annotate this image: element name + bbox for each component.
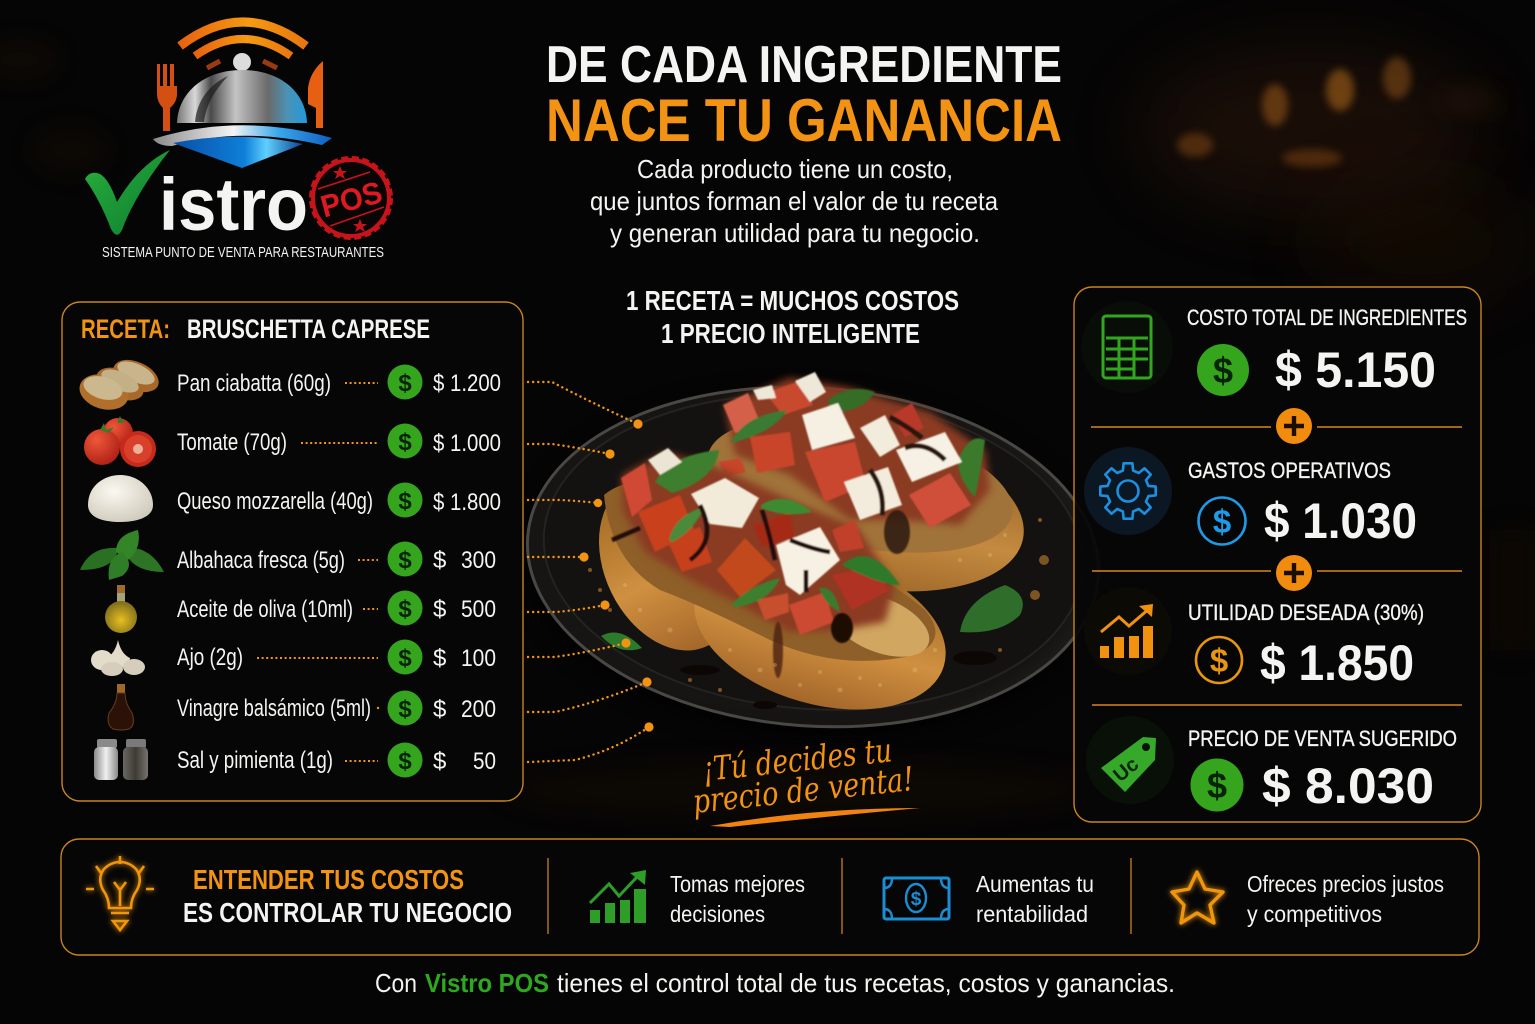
row: ajo: $ bbox=[398, 645, 412, 672]
text: decisiones bbox=[670, 871, 805, 927]
row: albahaca: $ bbox=[398, 547, 412, 574]
row: pan ciabatta bbox=[177, 364, 501, 400]
row: pan ciabatta: Pan ciabatta (60g) bbox=[177, 370, 331, 397]
icon: light bulb bbox=[86, 856, 154, 930]
row: costo total: $ 5.150 bbox=[1275, 342, 1436, 398]
crust crumbs bbox=[623, 533, 1007, 692]
row: vinagre bbox=[177, 690, 496, 726]
text: precios justos: y competitivos bbox=[1247, 901, 1382, 927]
icon: basil bbox=[80, 530, 164, 580]
row: tomate: $ bbox=[398, 429, 412, 456]
callout: tu decides: ¡Tú decides tu bbox=[701, 730, 894, 789]
icon: calculator bbox=[1081, 301, 1173, 393]
subtitle: y generan utilidad para tu negocio. bbox=[610, 218, 980, 248]
heading: entender: ENTENDER TUS COSTOS bbox=[193, 864, 464, 895]
row: sal y pimienta bbox=[177, 742, 496, 778]
icon: POS stamp bbox=[311, 158, 391, 238]
row: aceite: $ bbox=[398, 596, 412, 623]
row: albahaca: Albahaca fresca (5g) bbox=[177, 547, 345, 574]
row: precio de venta bbox=[1086, 716, 1457, 814]
title: NACE TU GANANCIA bbox=[546, 87, 1062, 154]
row: gastos operativos: $ 1.030 bbox=[1264, 493, 1417, 549]
subtitle bbox=[590, 154, 998, 248]
row: gastos operativos bbox=[1084, 447, 1417, 549]
heading: 1 receta: 1 PRECIO INTELIGENTE bbox=[661, 318, 920, 349]
row: albahaca: 300 bbox=[461, 547, 496, 574]
connectors from ingredients to plate bbox=[528, 382, 649, 762]
icon: green check bbox=[85, 150, 170, 235]
bread front bbox=[572, 456, 964, 737]
subtitle: que juntos forman el valor de tu receta bbox=[590, 186, 998, 216]
heading: receta: RECETA: bbox=[81, 314, 170, 344]
row: queso: $ 1.800 bbox=[433, 489, 501, 516]
icon: price tag bbox=[1086, 716, 1174, 804]
row: sal y pimienta: $ bbox=[433, 748, 446, 775]
row: gastos operativos: $ bbox=[1213, 503, 1231, 540]
row: tomate: Tomate (70g) bbox=[177, 429, 287, 456]
row: vinagre: 200 bbox=[461, 696, 496, 723]
toppings front bbox=[612, 448, 900, 678]
heading: entender bbox=[183, 864, 512, 928]
footer text: Vistro POS bbox=[425, 968, 549, 998]
icon: banknote bbox=[884, 878, 949, 919]
icon: price tag: Uc bbox=[1109, 753, 1143, 787]
panel: receta bbox=[62, 302, 523, 801]
icon: green chart bbox=[590, 870, 646, 923]
wordmark: istro bbox=[159, 163, 308, 246]
icon: salt and pepper bbox=[94, 739, 148, 780]
title bbox=[546, 36, 1062, 154]
row: ajo: 100 bbox=[461, 645, 496, 672]
heading: receta: BRUSCHETTA CAPRESE bbox=[187, 314, 430, 344]
row: utilidad deseada: $ bbox=[1210, 642, 1228, 679]
underline brush bbox=[710, 808, 920, 827]
icon: gear bbox=[1084, 447, 1172, 535]
icon: banknote: $ bbox=[911, 889, 922, 910]
icon: fork bbox=[157, 64, 177, 131]
plate bbox=[515, 368, 1110, 755]
icon: knife bbox=[308, 61, 323, 128]
icon: cloche dome bbox=[177, 53, 307, 123]
row: utilidad deseada: $ 1.850 bbox=[1260, 635, 1414, 691]
tagline: SISTEMA PUNTO DE VENTA PARA RESTAURANTES bbox=[102, 244, 384, 261]
toppings back bbox=[719, 372, 990, 554]
row: utilidad deseada: UTILIDAD DESEADA (30%) bbox=[1188, 600, 1424, 625]
row: ajo: $ bbox=[433, 645, 446, 672]
separators bbox=[1091, 427, 1462, 705]
row: costo total bbox=[1081, 301, 1467, 398]
row: tomate bbox=[177, 424, 501, 458]
row: ajo bbox=[177, 640, 496, 674]
panel: costos bbox=[1074, 287, 1481, 822]
icon: plus bbox=[1276, 408, 1312, 444]
row: tomate: $ 1.000 bbox=[433, 430, 501, 457]
row: sal y pimienta: $ bbox=[398, 748, 412, 775]
icon: tomatoes bbox=[84, 416, 156, 467]
icon: vinegar bbox=[108, 684, 133, 730]
balsamic drizzle bbox=[680, 651, 997, 709]
text: precios justos: Ofreces precios justos bbox=[1247, 871, 1444, 897]
heading: 1 receta: 1 RECETA = MUCHOS COSTOS bbox=[626, 285, 959, 316]
leaf on plate bbox=[960, 585, 1023, 632]
row: gastos operativos: GASTOS OPERATIVOS bbox=[1188, 458, 1391, 483]
text: rentabilidad: rentabilidad bbox=[976, 901, 1088, 927]
row: queso bbox=[177, 482, 501, 518]
text: rentabilidad: Aumentas tu bbox=[976, 871, 1094, 897]
row: costo total: $ bbox=[1213, 350, 1233, 391]
dividers bbox=[548, 858, 1131, 934]
row: queso: Queso mozzarella (40g) bbox=[177, 488, 373, 515]
row: aceite: 500 bbox=[461, 596, 496, 623]
row: utilidad deseada bbox=[1084, 587, 1424, 691]
row: albahaca: $ bbox=[433, 547, 446, 574]
row: ajo: Ajo (2g) bbox=[177, 644, 243, 671]
text: precios justos bbox=[1247, 871, 1444, 927]
footer text: tienes el control total de tus recetas, costos y ganancias. bbox=[557, 968, 1175, 998]
icon: growth chart bbox=[1084, 587, 1172, 675]
title: DE CADA INGREDIENTE bbox=[546, 36, 1062, 94]
text: decisiones: Tomas mejores bbox=[670, 871, 805, 897]
text: decisiones: decisiones bbox=[670, 901, 765, 927]
footer text: Con bbox=[375, 968, 417, 998]
row: vinagre: $ bbox=[433, 696, 446, 723]
panel: beneficios bbox=[61, 839, 1479, 955]
icon: wifi arcs bbox=[180, 22, 306, 68]
row: aceite: $ bbox=[433, 596, 446, 623]
subtitle: Cada producto tiene un costo, bbox=[637, 154, 953, 184]
icon: olive oil bbox=[105, 585, 137, 633]
row: albahaca bbox=[177, 542, 496, 576]
row: precio de venta: $ bbox=[1207, 765, 1227, 806]
row: aceite: Aceite de oliva (10ml) bbox=[177, 596, 353, 623]
small leaf bbox=[601, 632, 642, 650]
heading: receta bbox=[81, 314, 430, 344]
callout: tu decides bbox=[691, 730, 920, 827]
row: sal y pimienta: Sal y pimienta (1g) bbox=[177, 747, 333, 774]
text: rentabilidad bbox=[976, 871, 1094, 927]
bread back bbox=[694, 395, 1038, 616]
row: precio de venta: PRECIO DE VENTA SUGERIDO bbox=[1188, 726, 1457, 751]
connector end dots bbox=[579, 419, 654, 732]
icon: blue base bbox=[173, 137, 303, 168]
food photo: bruschetta on plate bbox=[515, 368, 1110, 755]
callout: tu decides: precio de venta! bbox=[691, 759, 916, 821]
heading: entender: ES CONTROLAR TU NEGOCIO bbox=[183, 897, 512, 928]
row: sal y pimienta: 50 bbox=[473, 748, 496, 775]
row: aceite bbox=[177, 590, 496, 626]
crumbs bbox=[588, 518, 1049, 692]
icon: plus bbox=[1276, 555, 1312, 591]
row: precio de venta: $ 8.030 bbox=[1262, 758, 1434, 814]
row: queso: $ bbox=[398, 488, 412, 515]
row: vinagre: Vinagre balsámico (5ml) bbox=[177, 695, 371, 722]
logo: Vistro POS bbox=[85, 22, 391, 261]
icon: bread bbox=[75, 353, 164, 415]
icon: mozzarella bbox=[88, 475, 153, 522]
row: pan ciabatta: $ 1.200 bbox=[433, 370, 501, 397]
row: pan ciabatta: $ bbox=[398, 370, 412, 397]
icon: garlic bbox=[91, 640, 145, 676]
icon: POS stamp: POS bbox=[317, 175, 386, 224]
heading: 1 receta bbox=[626, 285, 959, 349]
icon: star bbox=[1172, 872, 1223, 923]
row: vinagre: $ bbox=[398, 696, 412, 723]
icon: cloche plate bbox=[153, 125, 332, 146]
